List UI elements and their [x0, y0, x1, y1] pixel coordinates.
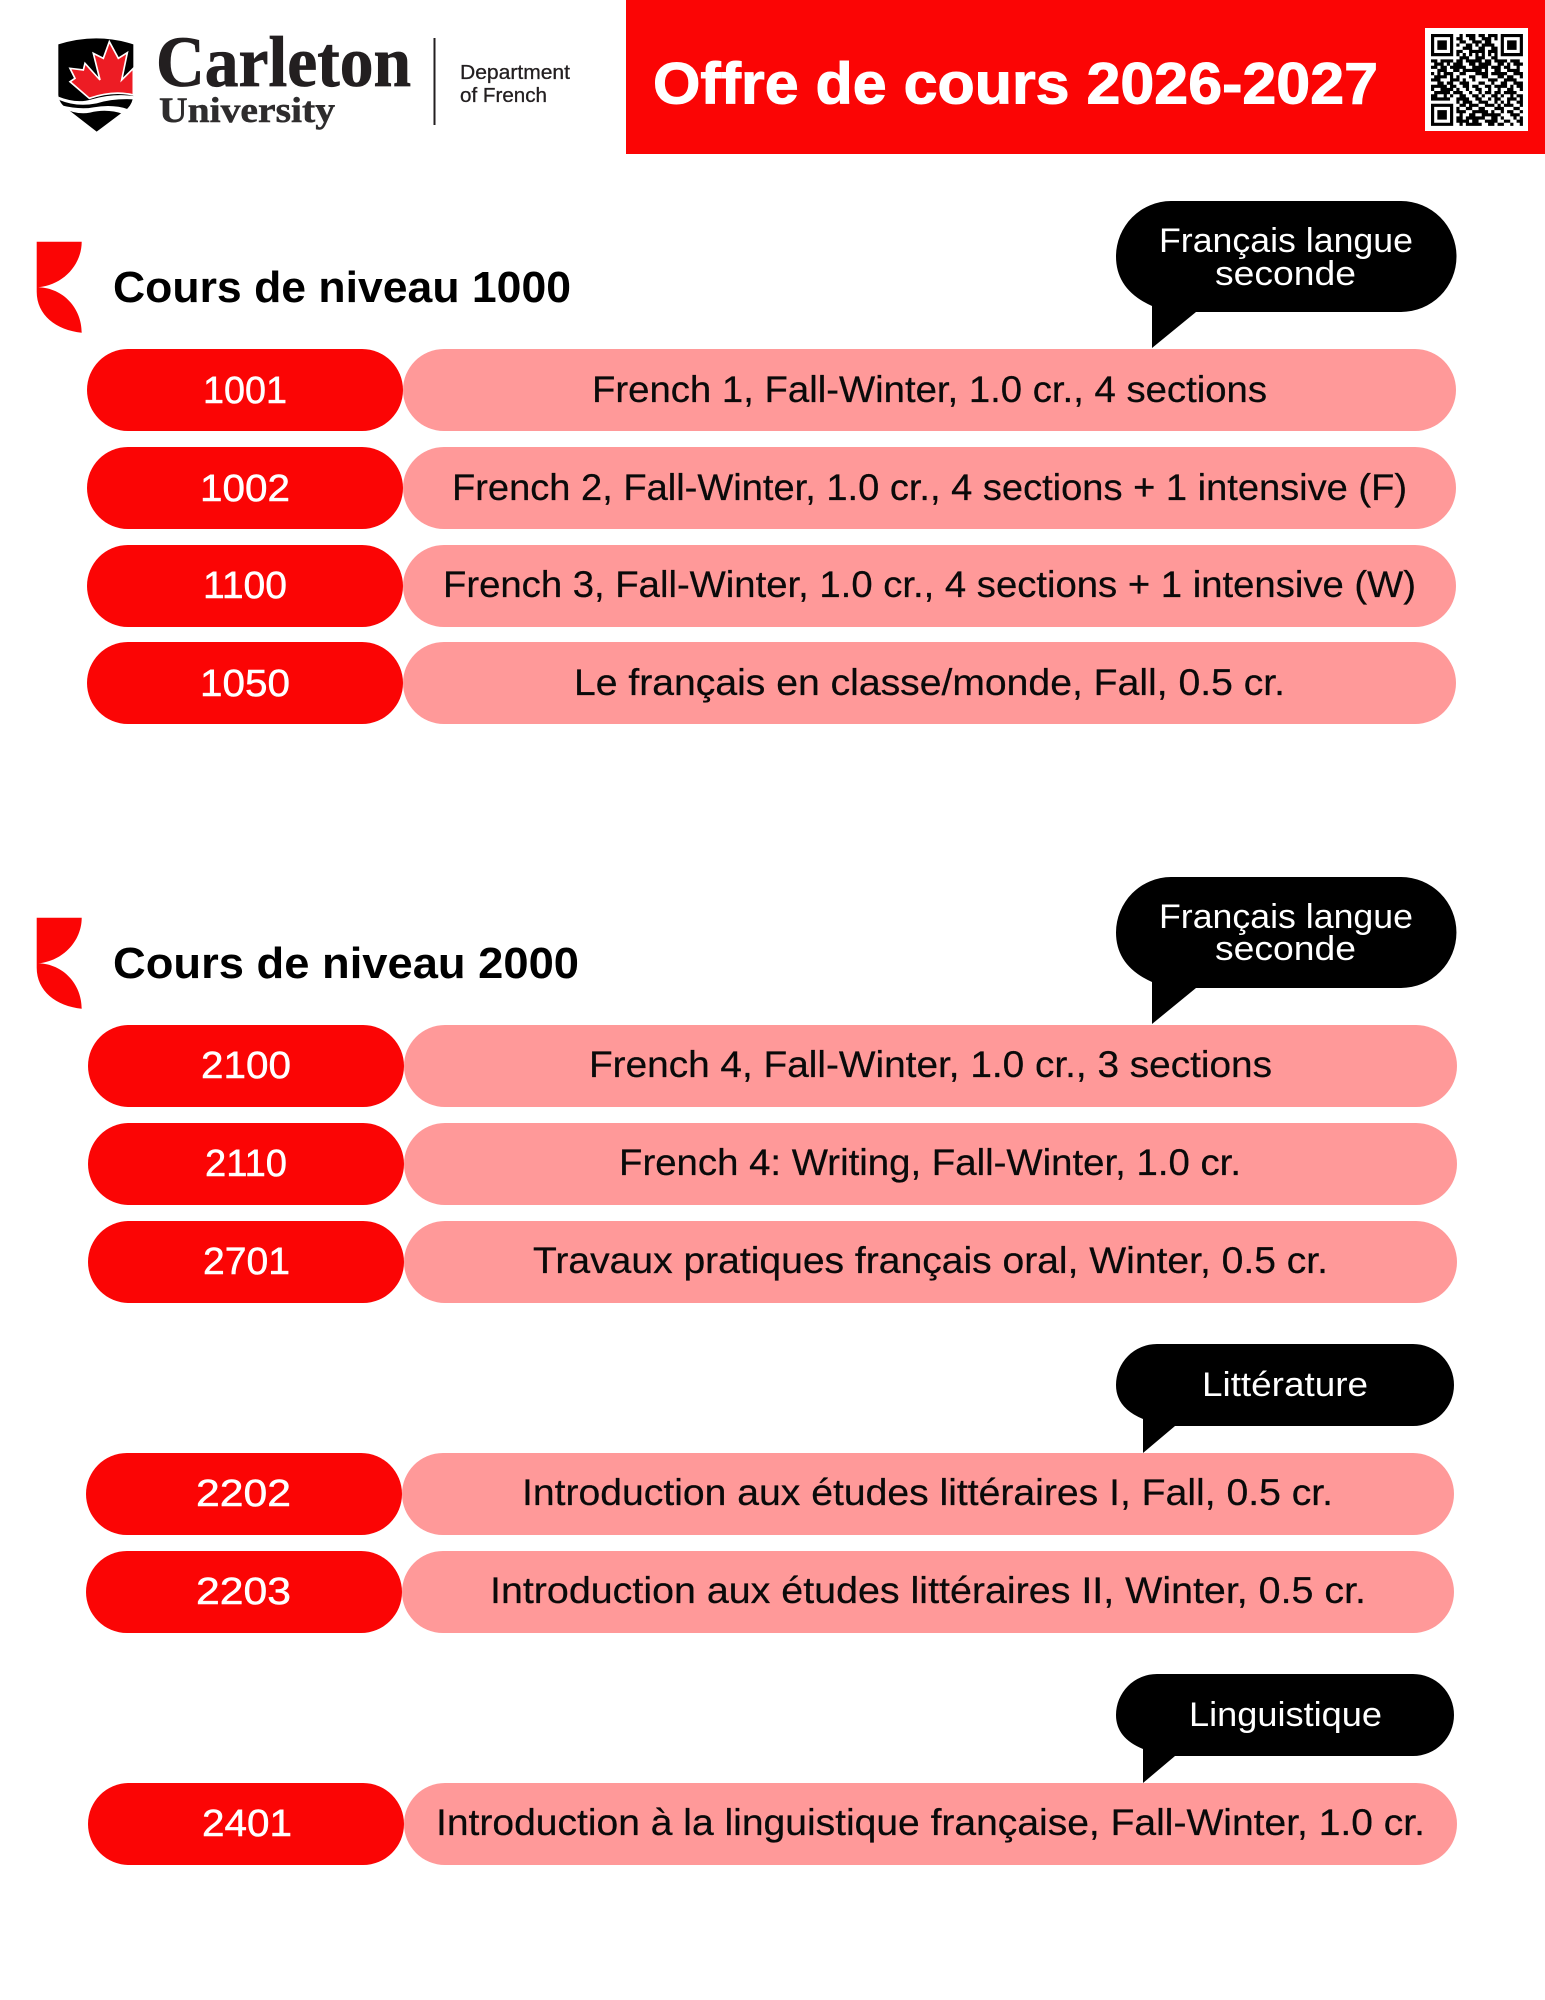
- course row 2202: Introduction aux études littéraires I, Fall, 0.5 cr.: [522, 1472, 1333, 1513]
- icon: section ribbon: [37, 918, 82, 1009]
- course row 1001: 1001: [203, 370, 287, 412]
- callout: Linguistique: Linguistique: [1189, 1696, 1382, 1734]
- callout: Français langue seconde: Français langue: [1159, 898, 1413, 936]
- callout: Français langue seconde: [1116, 877, 1456, 1024]
- course row 2401: Introduction à la linguistique française, Fall-Winter, 1.0 cr.: [436, 1802, 1425, 1843]
- course row 2100: French 4, Fall-Winter, 1.0 cr., 3 sections: [589, 1044, 1272, 1085]
- callout: Littérature: [1116, 1344, 1454, 1453]
- course row 2100: 2100: [201, 1045, 291, 1087]
- course row 2110: 2110: [205, 1143, 287, 1185]
- course row 1002: 1002: [200, 468, 290, 510]
- heading: Cours de niveau 2000: [113, 939, 579, 988]
- logo subtitle: University: [159, 90, 335, 130]
- icon: Carleton shield: [58, 38, 133, 132]
- course row 1002: French 2, Fall-Winter, 1.0 cr., 4 sections + 1 intensive (F): [452, 467, 1407, 508]
- logo divider: [434, 38, 436, 125]
- course row 2203: [86, 1551, 1454, 1633]
- icon: section ribbon: [37, 242, 82, 333]
- course row 2202: [86, 1453, 1454, 1535]
- course row 2701: [88, 1221, 1457, 1303]
- title: Offre de cours 2026-2027: [653, 52, 1378, 116]
- section: Cours de niveau 2000: [37, 877, 1457, 1865]
- callout: Français langue seconde: seconde: [1215, 930, 1356, 968]
- course row 1001: [87, 349, 1456, 431]
- callout: Français langue seconde: [1116, 201, 1456, 348]
- course row 1100: 1100: [203, 565, 287, 607]
- logo wordmark: Carleton: [156, 22, 411, 102]
- department name: Department: [460, 61, 570, 84]
- callout: Français langue seconde: Français langue: [1159, 222, 1413, 260]
- course row 2110: French 4: Writing, Fall-Winter, 1.0 cr.: [619, 1142, 1241, 1183]
- course row 2701: 2701: [203, 1241, 290, 1283]
- heading: Cours de niveau 1000: [113, 263, 571, 312]
- course row 2100: [88, 1025, 1457, 1107]
- course row 2202: 2202: [196, 1473, 291, 1515]
- course row 2701: Travaux pratiques français oral, Winter, 0.5 cr.: [533, 1240, 1328, 1281]
- course row 1001: French 1, Fall-Winter, 1.0 cr., 4 sections: [592, 369, 1267, 410]
- course row 2401: [88, 1783, 1457, 1865]
- course row 1050: 1050: [200, 663, 290, 705]
- title banner: [626, 0, 1545, 154]
- course row 1002: [87, 447, 1456, 529]
- department name: of French: [460, 84, 547, 107]
- callout: Linguistique: [1116, 1674, 1454, 1783]
- course row 2401: 2401: [202, 1803, 292, 1845]
- department name: [460, 61, 570, 107]
- section: Cours de niveau 1000: [37, 201, 1457, 724]
- course row 1050: Le français en classe/monde, Fall, 0.5 cr.: [574, 662, 1285, 703]
- course row 2110: [88, 1123, 1457, 1205]
- course row 1100: French 3, Fall-Winter, 1.0 cr., 4 sections + 1 intensive (W): [443, 564, 1416, 605]
- course row 2203: 2203: [196, 1571, 291, 1613]
- callout: Français langue seconde: seconde: [1215, 255, 1356, 293]
- course row 1050: [87, 642, 1456, 724]
- course row 2203: Introduction aux études littéraires II, Winter, 0.5 cr.: [490, 1570, 1366, 1611]
- QR code: [1425, 28, 1528, 131]
- logo: Carleton University, Department of French: [58, 22, 570, 132]
- course row 1100: [87, 545, 1456, 627]
- callout: Littérature: Littérature: [1202, 1366, 1368, 1404]
